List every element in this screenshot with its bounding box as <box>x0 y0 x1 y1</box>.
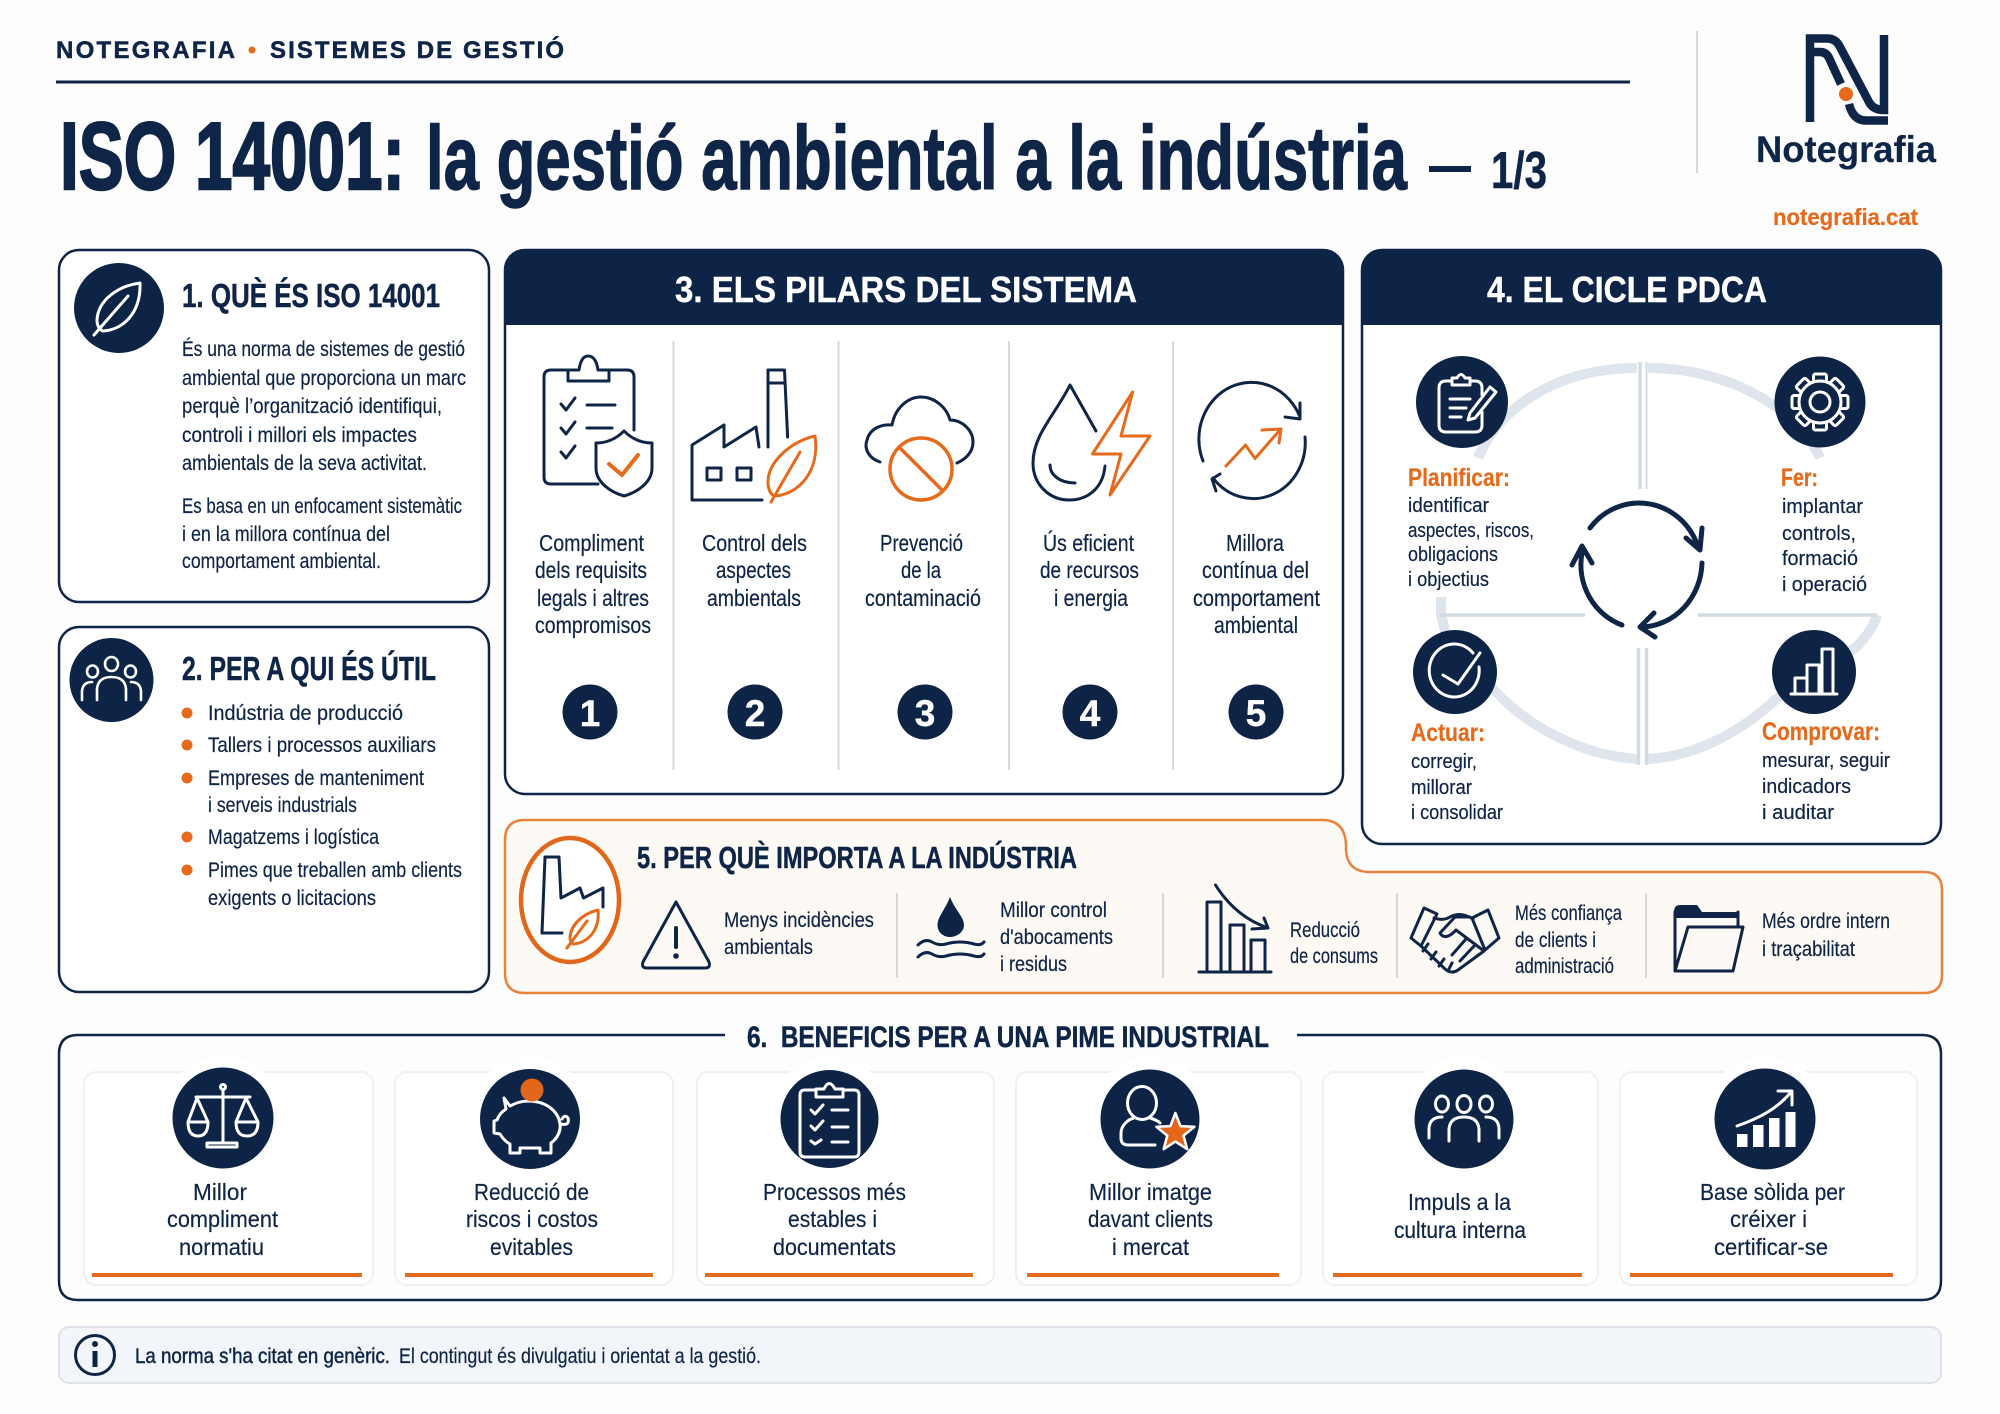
pillar 5: ambiental <box>1214 612 1298 638</box>
pillar 3: Prevenció <box>880 530 963 556</box>
pillar 3: de la <box>901 557 941 583</box>
step: planificar: aspectes, riscos, <box>1408 520 1534 542</box>
pillar 3 <box>865 397 981 740</box>
icon: piggy bank <box>494 1098 568 1153</box>
title <box>60 103 1547 210</box>
benefit 2: Reducció de <box>474 1179 589 1205</box>
benefit 5 <box>1323 1057 1598 1285</box>
header kicker <box>56 36 564 64</box>
item: millor control: Millor control <box>1000 899 1107 922</box>
benefit 4: i mercat <box>1112 1234 1190 1260</box>
item: menys incidències: Menys incidències <box>724 909 874 932</box>
pillar 5 <box>1193 382 1321 740</box>
icon: drop and bolt <box>1033 385 1150 500</box>
benefit 4: Millor imatge <box>1089 1179 1212 1205</box>
pillar 4: Ús eficient <box>1043 530 1135 556</box>
cycle ring <box>1440 362 1877 765</box>
text block 1: comportament ambiental. <box>182 550 381 573</box>
benefit 2: riscos i costos <box>466 1206 598 1232</box>
icon: factory with leaf <box>692 370 816 502</box>
benefit 1: normatiu <box>179 1234 264 1260</box>
benefit 1: compliment <box>167 1206 279 1232</box>
benefit 3: estables i <box>788 1206 877 1232</box>
benefit 6: Base sòlida per <box>1700 1179 1845 1205</box>
title: 1/3 <box>1491 142 1547 200</box>
step: actuar: i consolidar <box>1411 802 1503 824</box>
step: fer: formació <box>1782 548 1858 570</box>
pillar 2: aspectes <box>716 557 791 583</box>
footer note: La norma s'ha citat en genèric. <box>135 1345 390 1368</box>
icon: people <box>1429 1096 1499 1141</box>
center cycle arrows <box>1572 503 1702 637</box>
step: planificar: identificar <box>1408 495 1489 517</box>
item: més ordre intern <box>1674 905 1890 971</box>
icon: cloud with prohibition <box>866 397 973 500</box>
footer note <box>59 1327 1941 1383</box>
pillar 5: comportament <box>1193 585 1321 611</box>
step: planificar: obligacions <box>1408 544 1498 566</box>
icon: user with star <box>1121 1086 1194 1149</box>
logo: Notegrafia <box>1756 129 1936 170</box>
benefit 1: Millor <box>193 1179 247 1205</box>
text block 1 <box>182 338 466 573</box>
benefit 3: Processos més <box>763 1179 906 1205</box>
step: actuar <box>1411 630 1503 824</box>
logo <box>1697 31 1936 230</box>
pillar 1: compromisos <box>535 612 651 638</box>
text block 1: ambiental que proporciona un marc <box>182 367 466 390</box>
icon: people <box>70 638 154 722</box>
heading 6: 6. BENEFICIS PER A UNA PIME INDUSTRIAL <box>747 1021 1269 1054</box>
bullet list <box>182 702 462 910</box>
panel 4: el cicle PDCA <box>1362 250 1941 844</box>
heading 2: 2. PER A QUI ÉS ÚTIL <box>182 650 436 687</box>
benefit 2: evitables <box>490 1234 573 1260</box>
pillar 4 <box>1033 385 1150 740</box>
title: la gestió ambiental a la indústria <box>426 109 1408 209</box>
step: comprovar: indicadors <box>1762 776 1851 798</box>
pillar 2: ambientals <box>707 585 801 611</box>
bullet list: Empreses de manteniment <box>208 767 424 790</box>
pillar 2: 2 <box>745 693 765 734</box>
item: reducció de consums <box>1199 885 1378 972</box>
pillar 1: Compliment <box>539 530 645 556</box>
text block 1: ambientals de la seva activitat. <box>182 452 427 475</box>
bullet list: Magatzems i logística <box>208 826 379 849</box>
bullet list: i serveis industrials <box>208 794 357 817</box>
step: actuar: corregir, <box>1411 751 1477 773</box>
icon: scales <box>188 1084 258 1147</box>
item: més confiança: administració <box>1515 955 1614 978</box>
pillar 4: i energia <box>1054 585 1128 611</box>
pillar 4: 4 <box>1080 693 1101 734</box>
panel 1: què és ISO 14001 <box>59 250 489 602</box>
pillar 1 <box>535 356 652 740</box>
heading 3: 3. ELS PILARS DEL SISTEMA <box>675 269 1137 310</box>
pillar 5: Millora <box>1226 530 1284 556</box>
bullet list: exigents o licitacions <box>208 887 376 910</box>
benefit 1 <box>84 1056 373 1285</box>
logo mark <box>1810 35 1888 122</box>
heading 5: 5. PER QUÈ IMPORTA A LA INDÚSTRIA <box>637 839 1077 875</box>
pillar 1: dels requisits <box>535 557 647 583</box>
text block 1: controli i millori els impactes <box>182 424 417 447</box>
icon: clipboard with shield <box>544 356 652 496</box>
header kicker: SISTEMES DE GESTIÓ <box>270 36 564 64</box>
step: comprovar: Comprovar: <box>1762 718 1880 746</box>
text block 1: i en la millora contínua del <box>182 523 390 546</box>
step: fer: Fer: <box>1781 464 1818 492</box>
text block 1: És una norma de sistemes de gestió <box>182 338 465 361</box>
item: menys incidències: ambientals <box>724 936 813 959</box>
heading 4: 4. EL CICLE PDCA <box>1487 269 1767 310</box>
item: més confiança <box>1411 902 1622 978</box>
item: reducció de consums: de consums <box>1290 945 1378 968</box>
pillar 1: legals i altres <box>537 585 649 611</box>
icon: info <box>76 1336 114 1374</box>
benefit 3: documentats <box>773 1234 896 1260</box>
item: millor control <box>918 897 1113 976</box>
step: actuar: Actuar: <box>1411 719 1485 747</box>
item: millor control: i residus <box>1000 953 1067 976</box>
logo: notegrafia.cat <box>1773 204 1918 230</box>
benefit 6 <box>1620 1057 1917 1285</box>
benefit 5: Impuls a la <box>1408 1189 1511 1215</box>
item: més ordre intern: Més ordre intern <box>1762 910 1890 933</box>
step: fer: i operació <box>1782 574 1867 596</box>
bullet list: Tallers i processos auxiliars <box>208 734 436 757</box>
step: planificar: Planificar: <box>1408 464 1510 492</box>
benefit 4 <box>1016 1057 1301 1285</box>
footer note: El contingut és divulgatiu i orientat a la gestió. <box>399 1345 761 1368</box>
item: menys incidències <box>642 902 874 968</box>
step: comprovar: mesurar, seguir <box>1762 750 1890 772</box>
icon: factory in orange ring <box>521 838 619 962</box>
item: més ordre intern: i traçabilitat <box>1762 938 1855 961</box>
step: planificar <box>1408 356 1534 591</box>
step: comprovar <box>1762 630 1890 824</box>
benefit 3 <box>697 1057 994 1285</box>
pillar 3: contaminació <box>865 585 981 611</box>
icon: growth bars <box>1737 1091 1796 1147</box>
icon: leaf <box>74 263 164 353</box>
step: fer: controls, <box>1782 523 1856 545</box>
pillar 5: 5 <box>1246 693 1266 734</box>
icon: checklist clipboard <box>800 1084 859 1157</box>
benefit 4: davant clients <box>1088 1206 1213 1232</box>
item: més confiança: Més confiança <box>1515 902 1622 925</box>
benefit 2 <box>395 1057 673 1285</box>
pillar 4: de recursos <box>1040 557 1139 583</box>
panel 2: per a qui és útil <box>59 627 489 992</box>
pillar 1: 1 <box>580 693 600 734</box>
item: reducció de consums: Reducció <box>1290 919 1360 942</box>
panel 3: els pilars del sistema <box>505 250 1343 794</box>
pillar 3: 3 <box>915 693 935 734</box>
header kicker: NOTEGRAFIA <box>56 37 235 64</box>
item: més confiança: de clients i <box>1515 929 1596 952</box>
benefit 5: cultura interna <box>1394 1217 1526 1243</box>
pillar 2 <box>692 370 816 740</box>
bullet list: Pimes que treballen amb clients <box>208 859 462 882</box>
title: ISO 14001: <box>60 103 405 210</box>
pillar 2: Control dels <box>702 530 807 556</box>
pillar 5: contínua del <box>1202 557 1309 583</box>
benefit 6: créixer i <box>1730 1206 1807 1232</box>
panel 5: per què importa a la indústria <box>505 820 1942 993</box>
text block 1: perquè l’organització identifiqui, <box>182 395 442 418</box>
step: fer <box>1774 356 1867 596</box>
panel 6: beneficis per a una pime industrial <box>59 1021 1941 1300</box>
step: actuar: millorar <box>1411 777 1472 799</box>
text block 1: Es basa en un enfocament sistemàtic <box>182 495 462 518</box>
heading 1: 1. QUÈ ÉS ISO 14001 <box>182 277 440 314</box>
step: fer: implantar <box>1782 496 1863 518</box>
step: planificar: i objectius <box>1408 569 1489 591</box>
benefit 6: certificar-se <box>1714 1234 1828 1260</box>
icon: cycle with rising arrow <box>1199 382 1305 499</box>
bullet list: Indústria de producció <box>208 702 403 725</box>
item: millor control: d'abocaments <box>1000 926 1113 949</box>
step: comprovar: i auditar <box>1762 802 1834 824</box>
